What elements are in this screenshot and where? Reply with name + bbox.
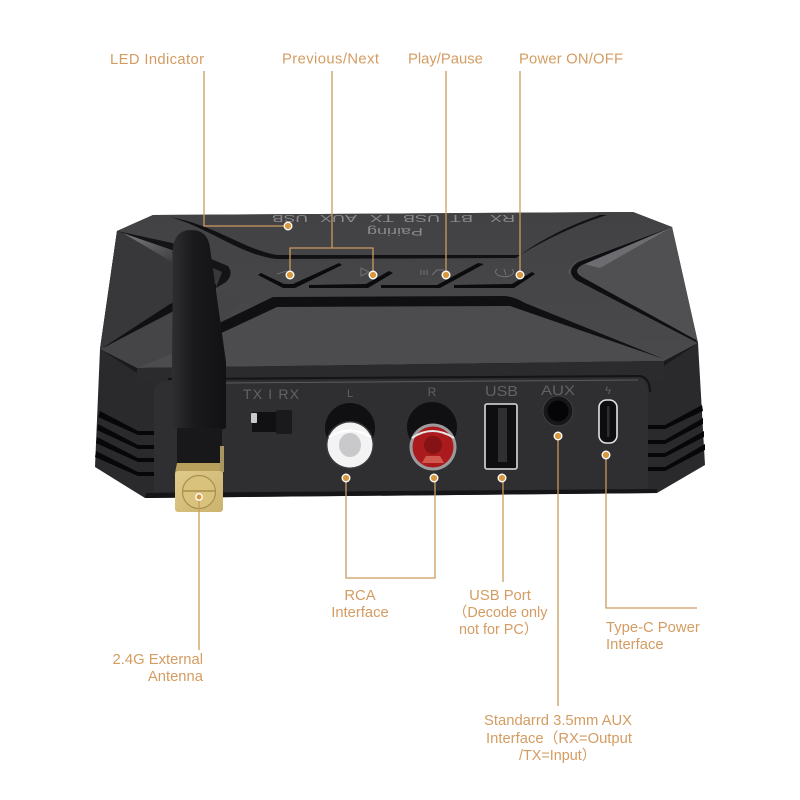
callout: Standard 3.5mm AUX: Standarrd 3.5mm AUX bbox=[484, 713, 632, 729]
callout: Power ON/OFF bbox=[516, 52, 623, 279]
callout: 2.4G External Antenna: 2.4G External bbox=[113, 652, 203, 668]
callout: Previous/Next bbox=[282, 52, 379, 279]
callout: 2.4G External Antenna bbox=[113, 494, 204, 685]
callout: Power ON/OFF: Power ON/OFF bbox=[519, 52, 623, 68]
RCA R connector bbox=[407, 402, 457, 470]
top printed labels: RX bbox=[489, 212, 515, 223]
callout: RCA Interface: RCA bbox=[344, 588, 376, 604]
left vents bbox=[95, 411, 154, 476]
callout: Type-C Power bbox=[602, 451, 700, 653]
callout: 2.4G External Antenna: Antenna bbox=[148, 669, 204, 685]
top printed labels: USB bbox=[402, 212, 440, 223]
panel printed labels bbox=[243, 382, 611, 402]
RCA L connector bbox=[325, 403, 375, 469]
callout: USB Port: not for PC） bbox=[459, 621, 538, 638]
top printed labels bbox=[271, 212, 515, 237]
callout: Play/Pause bbox=[408, 52, 483, 279]
callout: Standard 3.5mm AUX: /TX=Input） bbox=[519, 747, 596, 764]
top printed labels: USB bbox=[271, 212, 308, 223]
button icons bbox=[277, 268, 514, 277]
callout: LED Indicator: LED Indicator bbox=[110, 52, 204, 68]
Type-C port bbox=[599, 400, 617, 443]
panel printed labels: TX I RX bbox=[243, 386, 300, 402]
top printed labels: AUX bbox=[319, 212, 357, 223]
panel printed labels: AUX bbox=[541, 382, 576, 398]
device: Bluetooth transceiver box bbox=[95, 212, 705, 512]
antenna bbox=[172, 230, 226, 512]
device body side and front bbox=[95, 212, 705, 498]
button slits bbox=[258, 263, 535, 288]
right vents bbox=[648, 405, 705, 471]
callout: RCA Interface: Interface bbox=[331, 605, 389, 621]
top printed labels: BT bbox=[450, 212, 473, 223]
callout: USB Port: USB Port bbox=[469, 588, 531, 604]
top printed labels: Pairing bbox=[367, 225, 423, 237]
callout: Standard 3.5mm AUX: Interface（RX=Output bbox=[486, 730, 632, 747]
front recessed panel bbox=[154, 378, 648, 492]
callout: Type-C Power: Interface bbox=[606, 637, 664, 653]
callout: Type-C Power: Type-C Power bbox=[606, 620, 700, 636]
callout: Previous/Next: Previous/Next bbox=[282, 52, 379, 68]
callout: Standard 3.5mm AUX bbox=[484, 432, 632, 764]
callout: USB Port: （Decode only bbox=[453, 604, 548, 621]
callout: RCA Interface bbox=[331, 474, 438, 621]
panel printed labels: L bbox=[347, 388, 353, 400]
callout: USB Port bbox=[453, 474, 548, 638]
USB port bbox=[485, 404, 517, 469]
antenna gold connector bbox=[175, 471, 223, 512]
top printed labels: TX bbox=[369, 212, 394, 223]
AUX jack bbox=[543, 396, 573, 426]
panel printed labels: ϟ bbox=[605, 385, 611, 397]
device top lid bbox=[100, 212, 698, 368]
panel printed labels: R bbox=[428, 385, 437, 399]
panel printed labels: USB bbox=[485, 383, 518, 400]
TX/RX slide switch bbox=[251, 410, 292, 434]
callout: LED Indicator bbox=[110, 52, 292, 230]
callout: Play/Pause: Play/Pause bbox=[408, 52, 483, 68]
